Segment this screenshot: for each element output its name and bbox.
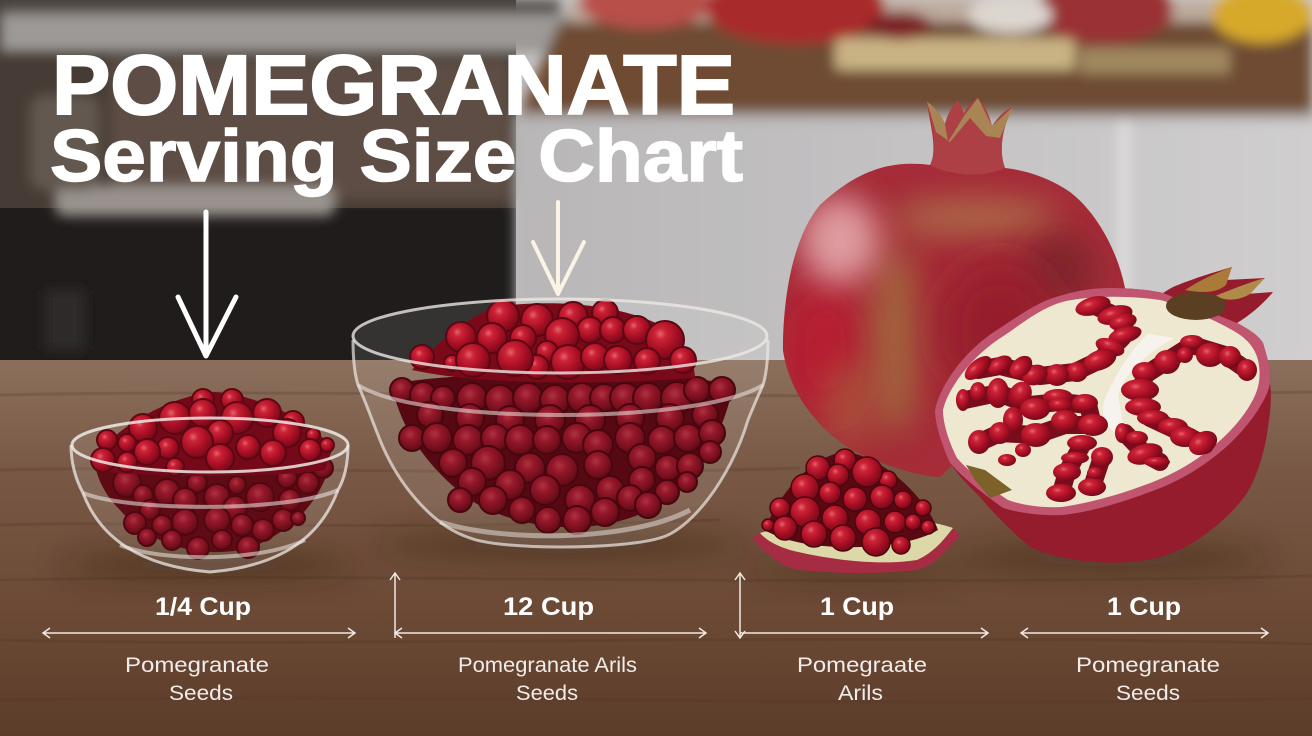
aril mass backing	[765, 452, 938, 547]
lower seeds	[113, 458, 333, 559]
arrow: large bowl	[533, 202, 584, 294]
measure: 1 cup arils column: 1 Cup	[820, 593, 894, 621]
measure: 1 cup seeds column: Pomegranate	[1076, 654, 1220, 677]
measure: 12 cup column: Pomegranate Arils	[458, 654, 637, 677]
upper seeds	[91, 389, 334, 476]
arils in cut face	[956, 293, 1257, 502]
wooden table	[0, 360, 1312, 736]
measure: 1 cup arils column	[735, 573, 988, 705]
glass body tint	[71, 416, 348, 572]
large glass bowl with arils	[353, 299, 768, 547]
upper aril mass backing	[412, 303, 695, 383]
pomegranate wedge	[752, 449, 960, 573]
glass outline	[71, 418, 348, 572]
measure: 12 cup column	[390, 573, 706, 705]
arrow: small bowl	[178, 212, 236, 356]
aril mass backing	[392, 374, 733, 527]
measure: 1/4 cup column: Pomegranate	[125, 654, 269, 677]
membrane	[1103, 334, 1175, 440]
measure: 1 cup seeds column: 1 Cup	[1107, 593, 1181, 621]
cut face	[935, 288, 1270, 515]
measure: 1 cup seeds column: Seeds	[1116, 682, 1180, 705]
halved pomegranate	[935, 267, 1273, 563]
title: Serving Size Chart	[50, 116, 743, 197]
measure: 1/4 cup column: 1/4 Cup	[155, 593, 251, 621]
glass outline	[353, 299, 768, 547]
title	[50, 38, 743, 197]
whole pomegranate	[783, 98, 1127, 477]
rind	[935, 267, 1273, 563]
measure: 12 cup column: Seeds	[516, 682, 578, 705]
shadows on table	[60, 533, 1270, 578]
glass body tint	[353, 301, 768, 547]
crown	[927, 98, 1013, 174]
measure: 1 cup arils column: Arils	[838, 682, 883, 705]
measure: 1 cup arils column: Pomegraate	[797, 654, 927, 677]
seed mass backing	[95, 465, 330, 552]
measure: 12 cup column: 12 Cup	[503, 593, 594, 621]
measure: 1/4 cup column	[43, 593, 355, 705]
brown calyx remains	[1185, 267, 1232, 292]
blurred kitchen background	[0, 0, 1312, 370]
upper arils	[410, 300, 696, 379]
upper seed mass backing	[95, 392, 332, 476]
measure: 1/4 cup column: Seeds	[169, 682, 233, 705]
aril cluster backing	[965, 306, 1247, 493]
small glass bowl with seeds	[71, 389, 348, 572]
lower arils	[390, 377, 735, 534]
measure: 1 cup seeds column	[1021, 593, 1268, 705]
title: POMEGRANATE	[52, 38, 735, 132]
